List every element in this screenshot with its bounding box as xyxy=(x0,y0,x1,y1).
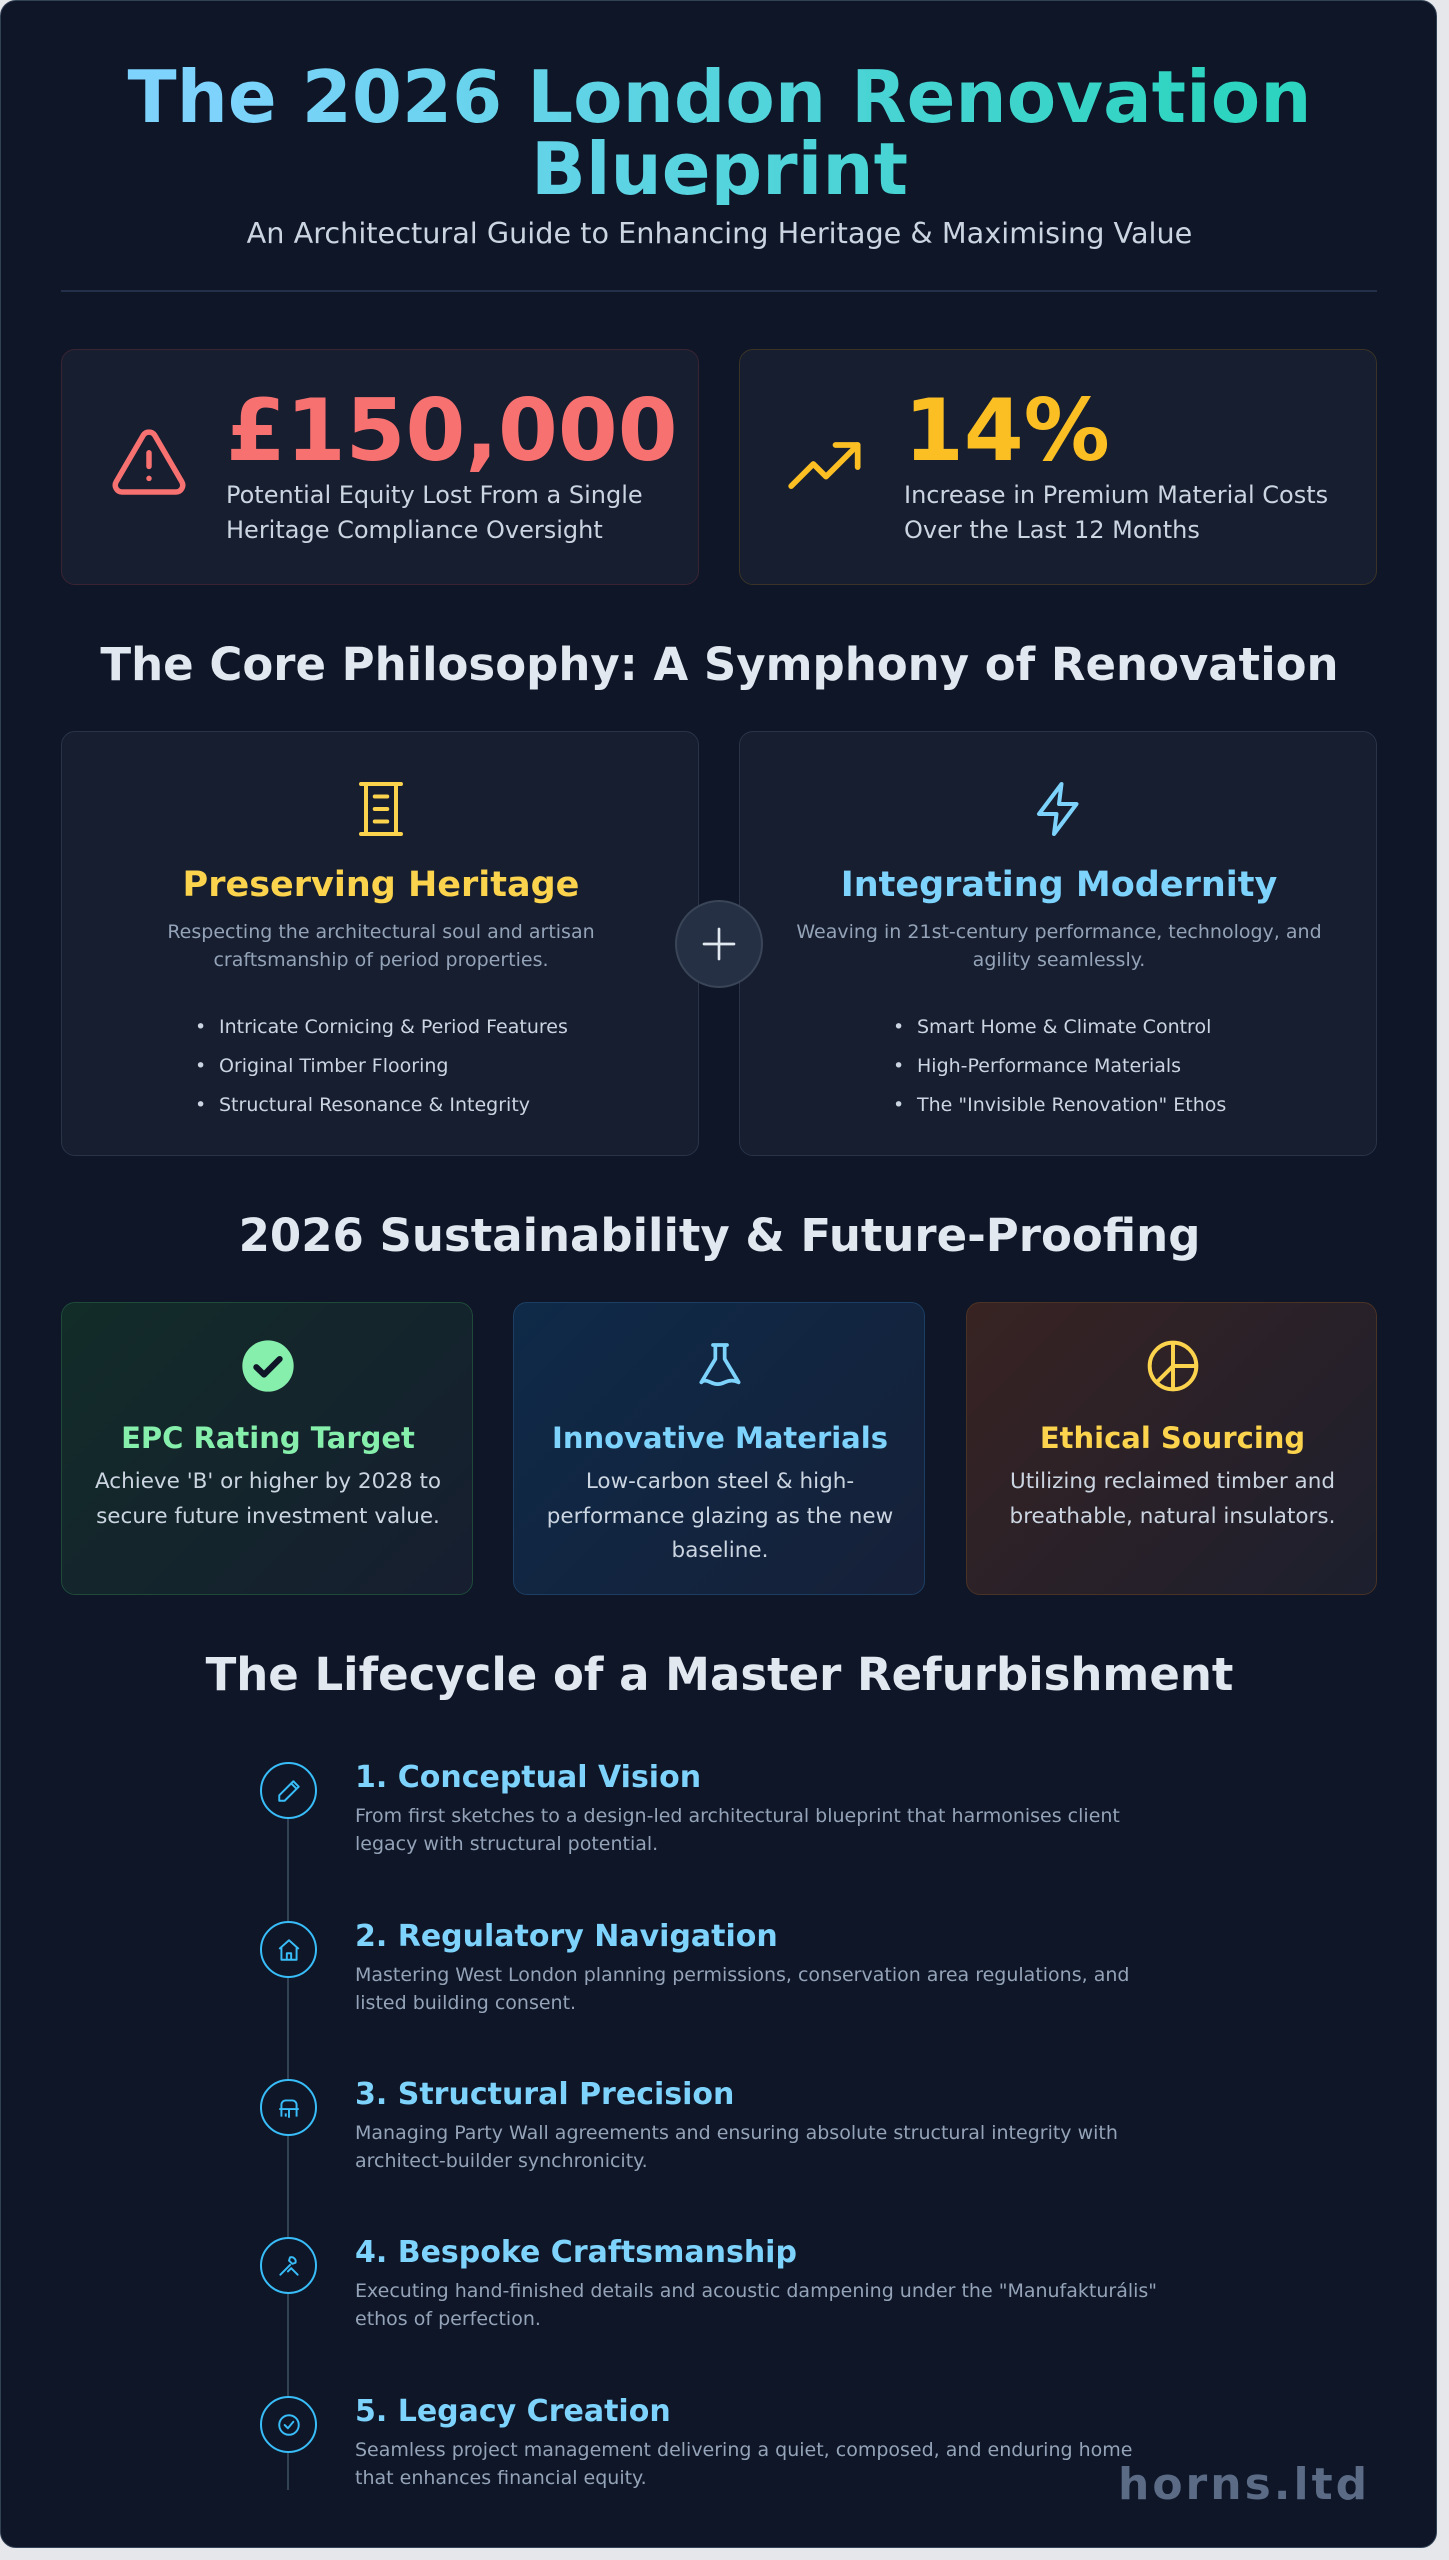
list: The "Invisible Renovation" Ethos xyxy=(917,1094,1226,1116)
step 3 xyxy=(260,2077,1118,2172)
text: listed building consent. xyxy=(355,1992,576,2014)
title: The 2026 London Renovation xyxy=(128,55,1312,139)
list xyxy=(896,1016,1226,1116)
text: performance glazing as the new xyxy=(547,1504,893,1528)
stat card: equity lost xyxy=(61,349,699,585)
text: that enhances financial equity. xyxy=(355,2467,647,2489)
description: Respecting the architectural soul and artisan xyxy=(167,921,595,943)
list: Intricate Cornicing & Period Features xyxy=(219,1016,568,1038)
text xyxy=(1010,1469,1335,1528)
icon: trend up xyxy=(788,442,860,489)
step 1 xyxy=(260,1760,1120,1855)
heading: Integrating Modernity xyxy=(841,865,1277,905)
list xyxy=(198,1016,568,1116)
text xyxy=(355,2077,1118,2172)
text: Low-carbon steel & high- xyxy=(586,1469,854,1494)
heading: Innovative Materials xyxy=(552,1421,888,1455)
heading: EPC Rating Target xyxy=(121,1421,415,1455)
text: From first sketches to a design-led architectural blueprint that harmonises client xyxy=(355,1805,1120,1827)
text: legacy with structural potential. xyxy=(355,1833,658,1855)
step 2 xyxy=(260,1919,1129,2014)
panel: ethical sourcing xyxy=(966,1302,1377,1595)
heading: core philosophy: The Core Philosophy: A Symphony of Renovation xyxy=(100,638,1339,691)
text: 3. Structural Precision xyxy=(355,2077,734,2112)
icon: column xyxy=(359,782,403,836)
description: Weaving in 21st-century performance, technology, and xyxy=(796,921,1322,943)
text xyxy=(547,1469,893,1563)
description xyxy=(167,921,595,971)
heading: lifecycle: The Lifecycle of a Master Refurbishment xyxy=(206,1648,1233,1701)
subtitle: An Architectural Guide to Enhancing Heritage & Maximising Value xyxy=(247,216,1192,250)
icon: check circle xyxy=(260,2396,317,2453)
text: breathable, natural insulators. xyxy=(1010,1504,1335,1528)
text: Utilizing reclaimed timber and xyxy=(1010,1469,1335,1494)
description: craftsmanship of period properties. xyxy=(213,949,549,971)
text xyxy=(355,2235,1157,2330)
icon: structure xyxy=(260,2079,317,2136)
list: Structural Resonance & Integrity xyxy=(219,1094,530,1116)
step 4 xyxy=(260,2235,1157,2330)
list: High-Performance Materials xyxy=(917,1055,1181,1077)
icon: plus connector xyxy=(675,900,763,988)
text xyxy=(355,2394,1132,2489)
text: architect-builder synchronicity. xyxy=(355,2150,648,2172)
timeline xyxy=(260,1760,1157,2490)
panel: EPC rating xyxy=(61,1302,473,1595)
icon: house xyxy=(260,1921,317,1978)
icon: pie xyxy=(1148,1340,1198,1392)
icon: warning xyxy=(112,429,186,495)
text: 1. Conceptual Vision xyxy=(355,1760,701,1795)
icon: flask xyxy=(699,1343,740,1386)
icon: check xyxy=(242,1340,294,1392)
heading: Preserving Heritage xyxy=(183,865,579,905)
label xyxy=(904,481,1328,544)
brand: horns.ltd: horns.ltd xyxy=(1118,2459,1370,2510)
panel: preserving heritage xyxy=(61,731,699,1156)
step 5 xyxy=(260,2394,1132,2489)
text xyxy=(95,1469,441,1528)
text: 5. Legacy Creation xyxy=(355,2394,671,2429)
list: Smart Home & Climate Control xyxy=(917,1016,1211,1038)
text: baseline. xyxy=(672,1538,768,1563)
text xyxy=(355,1760,1120,1855)
icon: pencil xyxy=(260,1762,317,1819)
list: Original Timber Flooring xyxy=(219,1055,448,1077)
text: secure future investment value. xyxy=(96,1504,440,1528)
text: Achieve 'B' or higher by 2028 to xyxy=(95,1469,441,1494)
label: Over the Last 12 Months xyxy=(904,516,1200,544)
text: 4. Bespoke Craftsmanship xyxy=(355,2235,797,2270)
description xyxy=(796,921,1322,971)
description: agility seamlessly. xyxy=(973,949,1145,971)
text: Seamless project management delivering a quiet, composed, and enduring home xyxy=(355,2439,1132,2461)
title: Blueprint xyxy=(531,127,908,211)
icon: lightning xyxy=(1036,782,1079,836)
panel: integrating modernity xyxy=(739,731,1377,1156)
label xyxy=(226,481,643,544)
number: £150,000 xyxy=(226,381,678,481)
panel: innovative materials xyxy=(513,1302,925,1595)
text: Executing hand-finished details and acoustic dampening under the "Manufakturális" xyxy=(355,2280,1157,2302)
text: Mastering West London planning permissions, conservation area regulations, and xyxy=(355,1964,1129,1986)
heading: sustainability: 2026 Sustainability & Future-Proofing xyxy=(239,1209,1200,1262)
label: Heritage Compliance Oversight xyxy=(226,516,603,544)
heading: Ethical Sourcing xyxy=(1040,1421,1305,1455)
number: 14% xyxy=(904,381,1110,481)
label: Increase in Premium Material Costs xyxy=(904,481,1328,509)
label: Potential Equity Lost From a Single xyxy=(226,481,643,509)
text xyxy=(355,1919,1129,2014)
title xyxy=(1,61,1438,205)
text: 2. Regulatory Navigation xyxy=(355,1919,778,1954)
text: Managing Party Wall agreements and ensuring absolute structural integrity with xyxy=(355,2122,1118,2144)
stat card: material costs xyxy=(739,349,1377,585)
text: ethos of perfection. xyxy=(355,2308,541,2330)
icon: tools xyxy=(260,2237,317,2294)
